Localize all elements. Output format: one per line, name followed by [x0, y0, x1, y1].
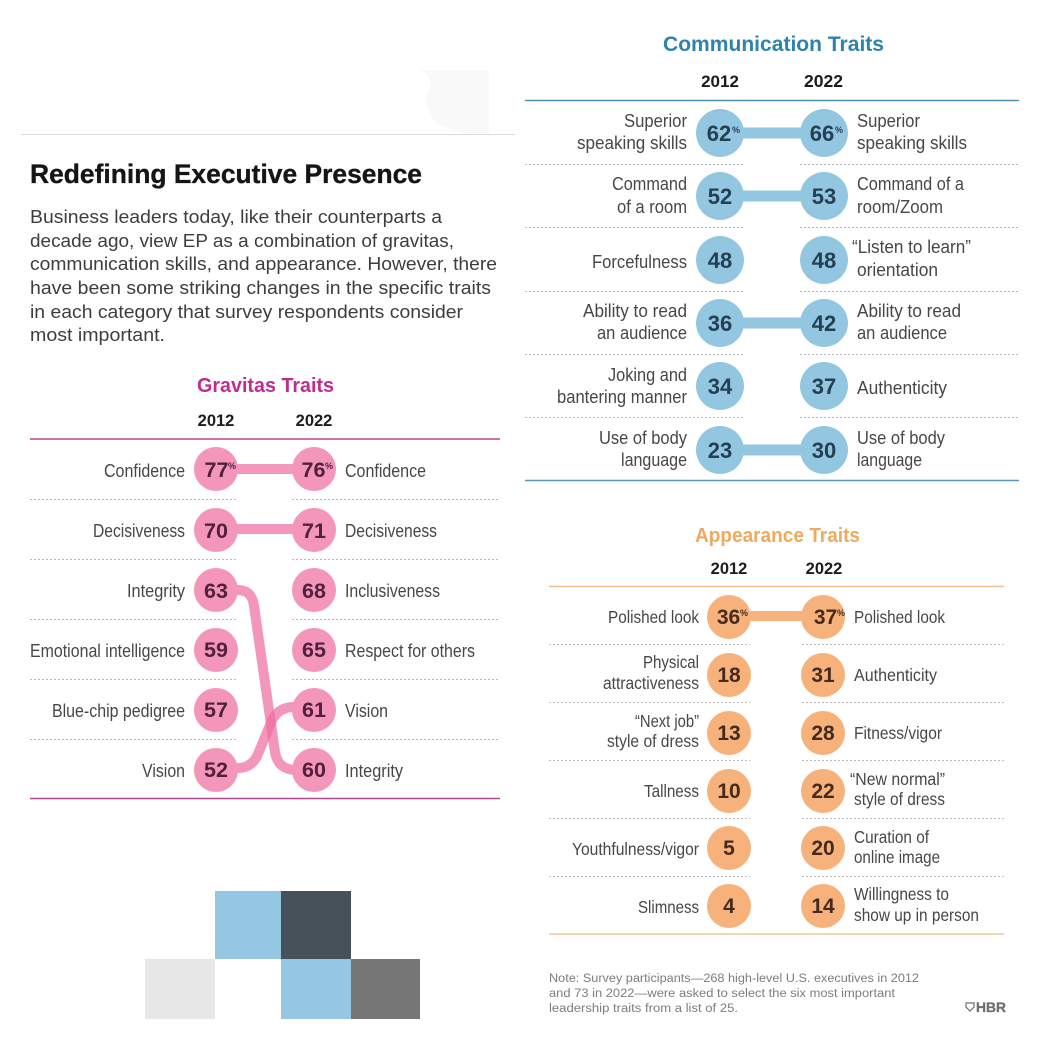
- labels: communication 2012: Ability to read: [583, 300, 687, 321]
- values: communication: 36: [708, 311, 732, 336]
- labels: communication 2012: [557, 110, 688, 470]
- labels: gravitas 2022: Vision: [345, 701, 388, 721]
- year headers: appearance: 2022: [806, 560, 842, 578]
- labels: appearance 2012: Youthfulness/vigor: [572, 839, 699, 859]
- year headers: gravitas: [198, 412, 332, 430]
- values: communication: 66: [810, 121, 834, 146]
- labels: appearance 2012: attractiveness: [603, 673, 699, 693]
- values: appearance: 13: [717, 722, 741, 745]
- labels: communication 2022: “Listen to learn”: [852, 236, 971, 257]
- values: communication: 23: [708, 438, 732, 463]
- labels: appearance 2012: “Next job”: [635, 711, 699, 731]
- values: appearance: 36: [717, 606, 740, 629]
- labels: appearance 2022: Polished look: [854, 607, 945, 627]
- intro text block: in each category that survey respondents consider: [30, 301, 463, 322]
- note: [549, 973, 919, 1015]
- circles: appearance 2022: [801, 595, 845, 928]
- labels: communication 2022: room/Zoom: [857, 196, 943, 217]
- values: gravitas: 77: [205, 458, 228, 482]
- labels: communication 2012: Forcefulness: [592, 251, 687, 272]
- labels: communication 2012: of a room: [617, 196, 687, 217]
- labels: communication 2012: Command: [612, 173, 687, 194]
- values: gravitas: 52: [204, 758, 228, 782]
- labels: communication 2012: Superior: [624, 110, 687, 131]
- labels: communication 2012: Use of body: [599, 427, 688, 448]
- values: appearance: 4: [723, 895, 735, 918]
- year headers: communication: [701, 71, 843, 91]
- labels: communication 2022: Use of body: [857, 427, 946, 448]
- connectors: gravitas: [216, 469, 314, 770]
- values: communication: 48: [708, 248, 732, 273]
- labels: gravitas 2022: [345, 461, 475, 781]
- values: gravitas: 57: [204, 698, 228, 722]
- heading: gravitas traits: Gravitas Traits: [197, 375, 334, 397]
- labels: gravitas 2012: Emotional intelligence: [30, 641, 185, 661]
- intro text block: most important.: [30, 324, 165, 345]
- labels: gravitas 2022: Integrity: [345, 761, 403, 781]
- values: communication: 48: [812, 248, 836, 273]
- labels: communication 2022: Ability to read: [857, 300, 961, 321]
- year headers: gravitas: 2012: [198, 412, 234, 430]
- labels: gravitas 2022: Inclusiveness: [345, 581, 440, 601]
- values: appearance: 18: [717, 664, 741, 687]
- values: communication: 34: [708, 374, 733, 399]
- labels: communication 2022: Command of a: [857, 173, 965, 194]
- panel: communication traits: [525, 33, 1019, 480]
- values: communication: 62: [707, 121, 731, 146]
- circles: communication 2012: [696, 109, 744, 474]
- values: gravitas: 63: [204, 579, 228, 603]
- values: appearance: %: [740, 608, 748, 618]
- labels: communication 2022: Authenticity: [857, 377, 948, 398]
- note: leadership traits from a list of 25.: [549, 1003, 738, 1015]
- labels: gravitas 2022: Confidence: [345, 461, 426, 481]
- labels: appearance 2022: style of dress: [854, 789, 945, 809]
- labels: appearance 2012: style of dress: [607, 731, 699, 751]
- values: appearance: 14: [811, 895, 835, 918]
- note: and 73 in 2022—were asked to select the six most important: [549, 988, 896, 1000]
- labels: appearance 2022: Fitness/vigor: [854, 723, 942, 743]
- labels: communication 2022: [852, 110, 971, 470]
- panel: gravitas traits: [30, 375, 500, 798]
- labels: gravitas 2012: Blue-chip pedigree: [52, 701, 185, 721]
- labels: gravitas 2012: Confidence: [104, 461, 185, 481]
- circles: communication 2022: [800, 109, 848, 474]
- labels: gravitas 2022: Decisiveness: [345, 521, 437, 541]
- labels: appearance 2022: Curation of: [854, 827, 929, 847]
- values: appearance: 37: [814, 606, 837, 629]
- intro text block: communication skills, and appearance. However, there: [30, 253, 497, 274]
- values: communication: [707, 121, 843, 463]
- values: appearance: 22: [811, 780, 835, 803]
- values: gravitas: %: [228, 461, 236, 471]
- values: communication: %: [732, 125, 740, 135]
- year headers: appearance: [711, 560, 842, 578]
- connector: appearance: [729, 611, 823, 621]
- note: Note: Survey participants—268 high-level U.S. executives in 2012: [549, 973, 919, 985]
- intro text block: have been some striking changes in the specific traits: [30, 277, 491, 298]
- labels: communication 2012: language: [621, 449, 687, 470]
- labels: communication 2022: language: [857, 449, 922, 470]
- circles: gravitas 2012: [194, 447, 238, 792]
- values: appearance: 31: [811, 664, 835, 687]
- labels: appearance 2022: “New normal”: [850, 769, 945, 789]
- values: communication: 52: [708, 184, 732, 209]
- labels: appearance 2022: [850, 607, 979, 925]
- values: gravitas: 68: [302, 579, 326, 603]
- values: gravitas: [204, 458, 333, 782]
- values: gravitas: 61: [302, 698, 326, 722]
- values: gravitas: 65: [302, 638, 326, 662]
- values: communication: 53: [812, 184, 836, 209]
- labels: appearance 2012: Polished look: [608, 607, 699, 627]
- values: communication: %: [835, 125, 843, 135]
- values: communication: 30: [812, 438, 836, 463]
- year headers: communication: 2022: [804, 71, 843, 91]
- values: appearance: [717, 606, 845, 918]
- labels: appearance 2022: Willingness to: [854, 884, 949, 904]
- values: gravitas: 59: [204, 638, 228, 662]
- labels: communication 2012: an audience: [597, 322, 687, 343]
- labels: communication 2022: orientation: [857, 259, 938, 280]
- values: communication: 37: [812, 374, 836, 399]
- decorative color squares: [145, 891, 420, 1019]
- values: gravitas: 71: [302, 519, 326, 543]
- values: gravitas: 60: [302, 758, 326, 782]
- labels: appearance 2012: [572, 607, 699, 917]
- panel: appearance traits: [549, 525, 1004, 934]
- labels: appearance 2022: online image: [854, 847, 940, 867]
- values: appearance: 20: [811, 837, 835, 860]
- intro text block: Business leaders today, like their counterparts a: [30, 206, 443, 227]
- year headers: communication: 2012: [701, 72, 739, 91]
- labels: gravitas 2022: Respect for others: [345, 641, 475, 661]
- values: appearance: 5: [723, 837, 735, 860]
- year headers: appearance: 2012: [711, 560, 747, 578]
- labels: communication 2012: Joking and: [608, 364, 687, 385]
- year headers: gravitas: 2022: [296, 412, 332, 430]
- labels: appearance 2012: Physical: [643, 652, 699, 672]
- labels: gravitas 2012: Decisiveness: [93, 521, 185, 541]
- values: communication: 42: [812, 311, 836, 336]
- labels: appearance 2012: Tallness: [644, 781, 699, 801]
- labels: communication 2022: an audience: [857, 322, 947, 343]
- labels: communication 2012: bantering manner: [557, 386, 687, 407]
- intro text block: decade ago, view EP as a combination of gravitas,: [30, 230, 454, 251]
- circles: gravitas 2022: [292, 447, 336, 792]
- labels: gravitas 2012: Integrity: [127, 581, 185, 601]
- heading: communication traits: Communication Traits: [663, 33, 884, 56]
- values: gravitas: %: [325, 461, 333, 471]
- values: appearance: 28: [811, 722, 835, 745]
- labels: gravitas 2012: [30, 461, 185, 781]
- values: appearance: 10: [717, 780, 741, 803]
- labels: communication 2012: speaking skills: [577, 132, 687, 153]
- intro text block: [30, 206, 497, 345]
- heading: appearance traits: Appearance Traits: [695, 525, 860, 547]
- HBR logo: HBR: [976, 1000, 1006, 1015]
- connectors: communication: [720, 133, 824, 450]
- values: gravitas: 76: [302, 458, 325, 482]
- labels: communication 2022: speaking skills: [857, 132, 967, 153]
- labels: appearance 2022: show up in person: [854, 905, 979, 925]
- values: gravitas: 70: [204, 519, 228, 543]
- title: Redefining Executive Presence: [30, 159, 422, 189]
- labels: appearance 2022: Authenticity: [854, 665, 937, 685]
- labels: gravitas 2012: Vision: [142, 761, 185, 781]
- circles: appearance 2012: [707, 595, 751, 928]
- labels: communication 2022: Superior: [857, 110, 920, 131]
- values: appearance: %: [837, 608, 845, 618]
- labels: appearance 2012: Slimness: [638, 897, 699, 917]
